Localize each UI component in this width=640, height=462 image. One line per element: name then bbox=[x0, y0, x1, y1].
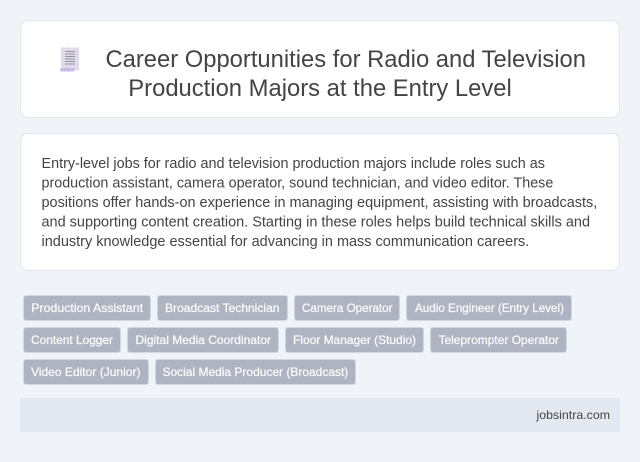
icon: document scroll bbox=[60, 47, 79, 72]
text block: description: Entry-level jobs for radio and television production majors include roles such as bbox=[42, 156, 545, 172]
footer source text: jobsintra.com bbox=[535, 408, 610, 422]
tag: Digital Media Coordinator: Digital Media Coordinator bbox=[136, 333, 271, 347]
tag: Audio Engineer (Entry Level) bbox=[406, 296, 572, 320]
tag: Floor Manager (Studio) bbox=[286, 328, 424, 352]
tag: Camera Operator bbox=[294, 296, 400, 320]
footer bbox=[20, 398, 620, 432]
tag: Broadcast Technician bbox=[158, 296, 288, 320]
text block: description: positions offer hands-on experience in managing equipment, assisting with broadcasts, bbox=[42, 195, 597, 211]
tag: Social Media Producer (Broadcast): Social Media Producer (Broadcast) bbox=[162, 365, 348, 379]
tag: Teleprompter Operator bbox=[430, 328, 566, 352]
tag list bbox=[24, 296, 572, 384]
tag: Broadcast Technician: Broadcast Technician bbox=[165, 301, 280, 315]
text block: description bbox=[42, 156, 597, 250]
tag: Video Editor (Junior) bbox=[24, 360, 148, 384]
tag: Content Logger: Content Logger bbox=[31, 333, 113, 347]
tag: Digital Media Coordinator bbox=[128, 328, 278, 352]
title: Production Majors at the Entry Level bbox=[128, 75, 512, 102]
text block: description: industry knowledge essential for advancing in mass communication careers. bbox=[42, 234, 529, 250]
tag: Social Media Producer (Broadcast) bbox=[156, 360, 356, 384]
text block: description: production assistant, camera operator, sound technician, and video editor. These bbox=[42, 176, 553, 192]
tag: Production Assistant bbox=[24, 296, 150, 320]
tag: Teleprompter Operator: Teleprompter Operator bbox=[438, 333, 559, 347]
tag: Production Assistant: Production Assistant bbox=[31, 301, 144, 315]
text block: description: and supporting content creation. Starting in these roles helps build technical skills and bbox=[42, 214, 590, 230]
panel: header bbox=[20, 20, 620, 118]
tag: Content Logger bbox=[24, 328, 120, 352]
title bbox=[106, 46, 586, 102]
tag: Video Editor (Junior): Video Editor (Junior) bbox=[31, 365, 140, 379]
tag: Audio Engineer (Entry Level): Audio Engineer (Entry Level) bbox=[415, 301, 564, 315]
title: Career Opportunities for Radio and Television bbox=[106, 46, 586, 73]
panel: description bbox=[20, 134, 620, 270]
tag: Camera Operator: Camera Operator bbox=[302, 301, 392, 315]
tag: Floor Manager (Studio): Floor Manager (Studio) bbox=[293, 333, 416, 347]
